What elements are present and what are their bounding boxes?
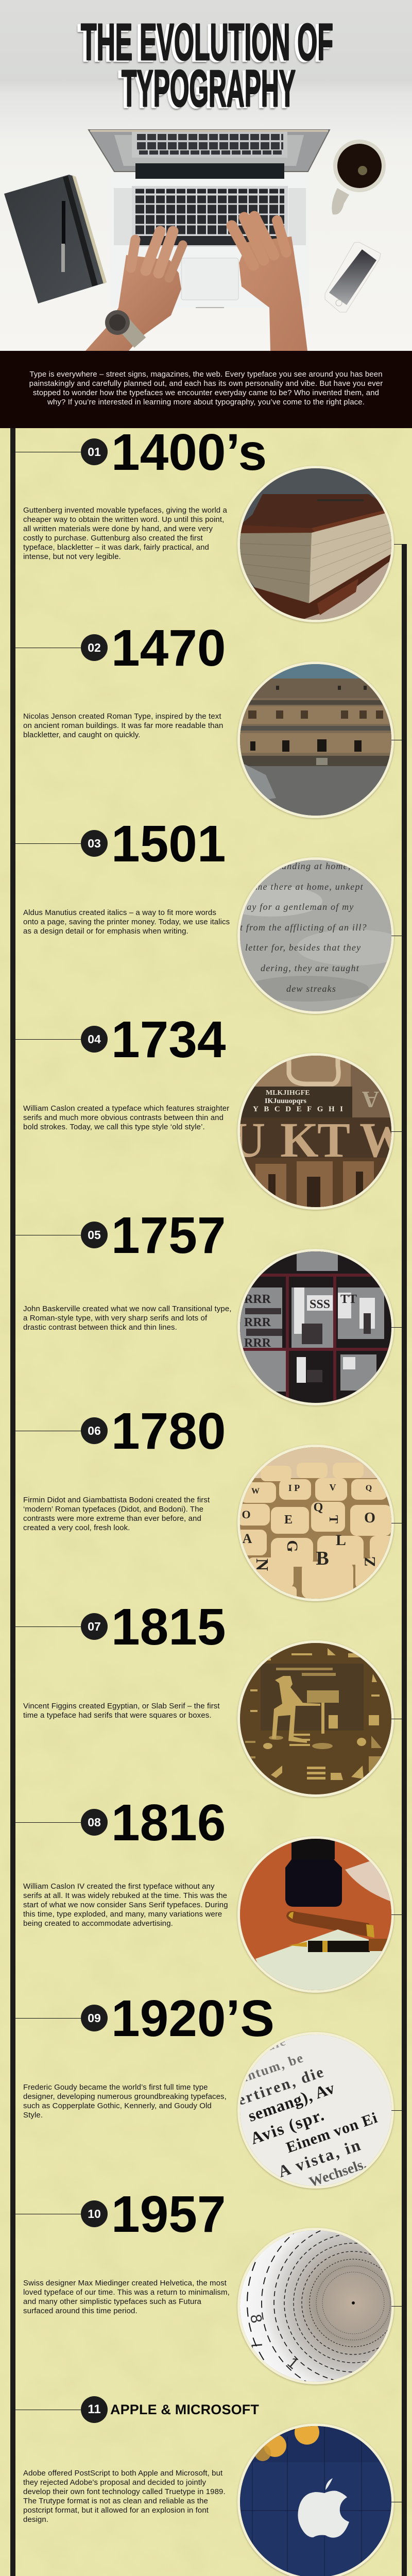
- text block: [23, 2469, 226, 2524]
- text block: cheaper way to obtain the written word. Up until this point,: [23, 515, 224, 524]
- text block: they rejected Adobe's proposal and decided to jointly: [23, 2478, 206, 2487]
- text block: Adobe offered PostScript to both Apple and Microsoft, but: [23, 2469, 222, 2478]
- text block: [23, 506, 227, 561]
- heading: 1957: [111, 2185, 226, 2243]
- hero photo: desk with laptop: [0, 0, 412, 351]
- step 11: [15, 2396, 395, 2576]
- text block: Vincent Figgins created Egyptian, or Slab Serif – the first: [23, 1702, 220, 1710]
- step 02: [15, 619, 395, 820]
- text block: intense, but not very legible.: [23, 552, 121, 561]
- text block: [23, 1496, 210, 1532]
- text block: being created to accommodate advertising.: [23, 1919, 173, 1928]
- photo: printed dictionary: semang), Av: [246, 2078, 337, 2125]
- text block: develop their own font technology called Truetype in 1989.: [23, 2487, 226, 2496]
- text block: Swiss designer Max Miedinger created Helvetica, the most: [23, 2279, 227, 2287]
- text block: serifs and much more obvious contrasts between thin and: [23, 1113, 224, 1122]
- icon: notebook and pen: [4, 175, 107, 303]
- step 10: [15, 2185, 395, 2386]
- text block: Style.: [23, 2111, 43, 2120]
- text block: [23, 2279, 230, 2315]
- text block: bold strokes. Today, we call this type style ‘old style’.: [23, 1123, 205, 1131]
- connector: [15, 1039, 81, 1040]
- photo: wood type: T: [317, 1112, 350, 1167]
- photo: metal type case: SSS: [310, 1298, 330, 1311]
- photo: wood type: K: [280, 1112, 319, 1167]
- number badge: 09: [88, 2011, 101, 2025]
- text block: William Caslon created a typeface which features straighter: [23, 1104, 229, 1113]
- number badge: 03: [88, 837, 101, 850]
- heading: 1400’s: [111, 423, 267, 481]
- photo: wooden letter cubes: V: [330, 1482, 336, 1493]
- photo: egyptian hieroglyphs: [237, 1640, 394, 1797]
- number badge: [81, 634, 108, 661]
- text block: [23, 712, 223, 739]
- text block: [23, 2083, 227, 2120]
- text block: [23, 1304, 232, 1332]
- photo: wood type: [237, 1053, 394, 1210]
- intro band: [0, 351, 412, 428]
- text block: contrasts were more extreme than ever before, and: [23, 1514, 201, 1523]
- connector: [15, 1822, 81, 1823]
- number badge: [81, 2396, 108, 2423]
- photo: wooden letter cubes: I P: [288, 1483, 300, 1493]
- photo: wooden letter cubes: E: [284, 1513, 293, 1527]
- step 03: [15, 815, 395, 1015]
- text block: on ancient roman buildings. It was far more readable than: [23, 721, 223, 730]
- photo: handwriting: for me there at home, unkept: [240, 882, 364, 892]
- text block: [23, 1702, 220, 1720]
- photo: wooden letter cubes: O: [364, 1510, 375, 1526]
- photo: metal type case: RRR: [244, 1316, 271, 1329]
- photo: wooden letter cubes: O: [242, 1508, 251, 1521]
- text block: drastic contrast between thick and thin lines.: [23, 1323, 177, 1332]
- heading: 1757: [111, 1207, 226, 1264]
- number badge: 05: [88, 1228, 101, 1242]
- photo: wooden letter cubes: W: [251, 1487, 260, 1496]
- heading: 1734: [111, 1011, 226, 1069]
- photo: swirl of numbers: [237, 2228, 394, 2384]
- photo: handwriting: dering, they are taught: [261, 963, 359, 973]
- photo: wooden letter cubes: G: [284, 1540, 301, 1552]
- number badge: 06: [88, 1424, 101, 1437]
- text block: Aldus Manutius created italics – a way to fit more words: [23, 908, 216, 917]
- photo: swirl of numbers: 1: [284, 2354, 301, 2372]
- icon: left hand with watch: [85, 231, 183, 351]
- photo: wooden letter cubes: A: [243, 1531, 252, 1546]
- text block: such as Copperplate Gothic, Kennerly, and Goudy Old: [23, 2102, 212, 2110]
- title: [76, 13, 333, 116]
- text block: time a typeface had serifs that were squares or boxes.: [23, 1711, 212, 1720]
- photo: handwriting: t from the afflicting of an ill?: [240, 922, 367, 933]
- photo: metal type case: RRR: [244, 1293, 271, 1306]
- number badge: [81, 1613, 108, 1640]
- photo: printed dictionary: [237, 2032, 394, 2189]
- photo: swirl of numbers: L: [248, 2343, 265, 2352]
- heading: 1501: [111, 815, 226, 873]
- number badge: [81, 1026, 108, 1053]
- intro text: why? If you’re interested in learning more about typography, you’ve come to the right place.: [47, 398, 365, 406]
- icon: smartphone: [325, 242, 381, 312]
- text block: a Roman-style type, with very sharp serifs and lots of: [23, 1314, 207, 1323]
- number badge: [81, 2200, 108, 2227]
- photo: metal type case: [237, 1249, 394, 1405]
- text block: onto a page, saving the printer money. Today, we use italics: [23, 918, 230, 926]
- heading: 1815: [111, 1598, 226, 1656]
- text block: as a design detail or for emphasis when writing.: [23, 927, 188, 936]
- number badge: 01: [88, 445, 101, 459]
- photo: handwriting: way for a gentleman of my: [240, 902, 354, 912]
- step 06: [15, 1402, 395, 1603]
- text block: Guttenberg invented movable typefaces, giving the world a: [23, 506, 227, 515]
- text block: [23, 908, 230, 936]
- photo: wood type: A: [362, 1087, 379, 1113]
- connector: [15, 1626, 81, 1627]
- step 04: [15, 1011, 395, 1211]
- step 09: [15, 1990, 395, 2190]
- photo: wooden letter cubes: [237, 1445, 394, 1601]
- number badge: 02: [88, 641, 101, 654]
- number badge: [81, 2005, 108, 2031]
- photo: ink bottle and pen: [237, 1836, 394, 1993]
- photo: wooden letter cubes: B: [316, 1548, 329, 1569]
- photo: wooden letter cubes: L: [336, 1532, 346, 1549]
- photo: wood type: IKJuuuopqrs: [265, 1097, 306, 1105]
- photo: wooden letter cubes: N: [252, 1558, 271, 1571]
- photo: roman theatre: [237, 662, 394, 818]
- photo: metal type case: RRR: [244, 1336, 271, 1350]
- number badge: [81, 438, 108, 465]
- photo: handwriting: dew streaks: [286, 984, 336, 994]
- right connector lines: [391, 740, 402, 2502]
- connector: [15, 843, 81, 844]
- step 07: [15, 1598, 395, 1799]
- text block: created a very cool, fresh look.: [23, 1523, 130, 1532]
- photo: apple logo wall: [237, 2424, 394, 2576]
- text block: John Baskerville created what we now call Transitional type,: [23, 1304, 232, 1313]
- text block: costly to purchase. Guttenburg also created the first: [23, 534, 203, 543]
- photo: wooden letter cubes: Q: [314, 1501, 323, 1514]
- intro text: Type is everywhere – street signs, magazines, the web. Every typeface you see around you has been: [29, 370, 383, 379]
- number badge: 10: [88, 2207, 101, 2221]
- heading: 1470: [111, 619, 226, 677]
- icon: laptop: [89, 130, 330, 308]
- number badge: 07: [88, 1620, 101, 1633]
- text block: [23, 1104, 229, 1131]
- intro text: painstakingly and carefully planned out, and each has its own personality and vibe. But have you ever: [29, 379, 383, 388]
- text block: William Caslon IV created the first typeface without any: [23, 1882, 215, 1891]
- photo: handwriting: [237, 857, 394, 1014]
- text block: all written materials were done by hand, and were very: [23, 524, 213, 533]
- text block: postcript format, but it allowed for an explosion in font: [23, 2506, 209, 2515]
- connector: [15, 2018, 81, 2019]
- text block: Frederic Goudy became the world’s first full time type: [23, 2083, 208, 2092]
- heading: 1816: [111, 1794, 226, 1852]
- text block: The Trutype format is not as clean and reliable as the: [23, 2497, 208, 2505]
- text block: surfaced around this time period.: [23, 2307, 138, 2315]
- photo: wooden letter cubes: Z: [362, 1556, 379, 1567]
- heading: APPLE & MICROSOFT: [110, 2402, 259, 2417]
- step 01: [15, 423, 395, 624]
- text block: blackletter, and caught on quickly.: [23, 731, 141, 739]
- text block: [23, 1882, 228, 1928]
- text block: start of what we now consider Sans Serif typefaces. During: [23, 1901, 228, 1909]
- text block: serifs at all. It was widely rebuked at the time. This was the: [23, 1891, 227, 1900]
- icon: coffee mug: [332, 140, 386, 215]
- number badge: 11: [88, 2402, 101, 2416]
- text block: this time, type exploded, and many, many variations were: [23, 1910, 222, 1919]
- icon: right hand: [232, 216, 307, 351]
- photo: handwriting: outstanding at home, as: [261, 861, 364, 871]
- text block: Firmin Didot and Giambattista Bodoni created the first: [23, 1496, 210, 1504]
- text block: typeface, blackletter – it was dark, fairly practical, and: [23, 543, 209, 552]
- photo: printed dictionary: Avis (spr.: [248, 2106, 328, 2148]
- text block: designer, developing numerous groundbreaking typefaces,: [23, 2092, 227, 2101]
- text block: design.: [23, 2515, 48, 2524]
- number badge: [81, 1222, 108, 1248]
- step 05: [15, 1207, 395, 1407]
- photo: wooden letter cubes: Q: [366, 1484, 372, 1493]
- photo: wooden letter cubes: T: [327, 1515, 340, 1523]
- number badge: [81, 1809, 108, 1836]
- photo: handwriting: letter for, besides that they: [245, 942, 361, 953]
- intro text: [29, 370, 383, 406]
- number badge: [81, 830, 108, 857]
- heading: 1920’S: [111, 1990, 274, 2047]
- intro text: stopped to wonder how the typefaces we encounter everyday came to be? Who invented them, and: [33, 388, 379, 397]
- text block: and many other simplistic typefaces such as Futura: [23, 2297, 201, 2306]
- number badge: [81, 1417, 108, 1444]
- text block: loved typeface of our time. This was a return to minimalism,: [23, 2288, 230, 2297]
- step 08: [15, 1794, 395, 1994]
- number badge: 04: [88, 1032, 101, 1046]
- photo: wood type: YBCDEFGHI: [253, 1105, 343, 1113]
- photo: wood type: MLKJIHGFE: [266, 1089, 310, 1097]
- number badge: 08: [88, 1816, 101, 1829]
- photo: old book: [237, 466, 394, 622]
- photo: swirl of numbers: 8: [247, 2313, 265, 2325]
- heading: 1780: [111, 1402, 226, 1460]
- photo: metal type case: TT: [340, 1293, 357, 1306]
- photo: printed dictionary: Einem von Ei: [284, 2109, 380, 2156]
- text block: Nicolas Jenson created Roman Type, inspired by the text: [23, 712, 221, 721]
- photo: printed dictionary: A vista, in: [276, 2135, 364, 2181]
- text block: ‘modern’ Roman typefaces (Didot, and Bodoni). The: [23, 1505, 203, 1514]
